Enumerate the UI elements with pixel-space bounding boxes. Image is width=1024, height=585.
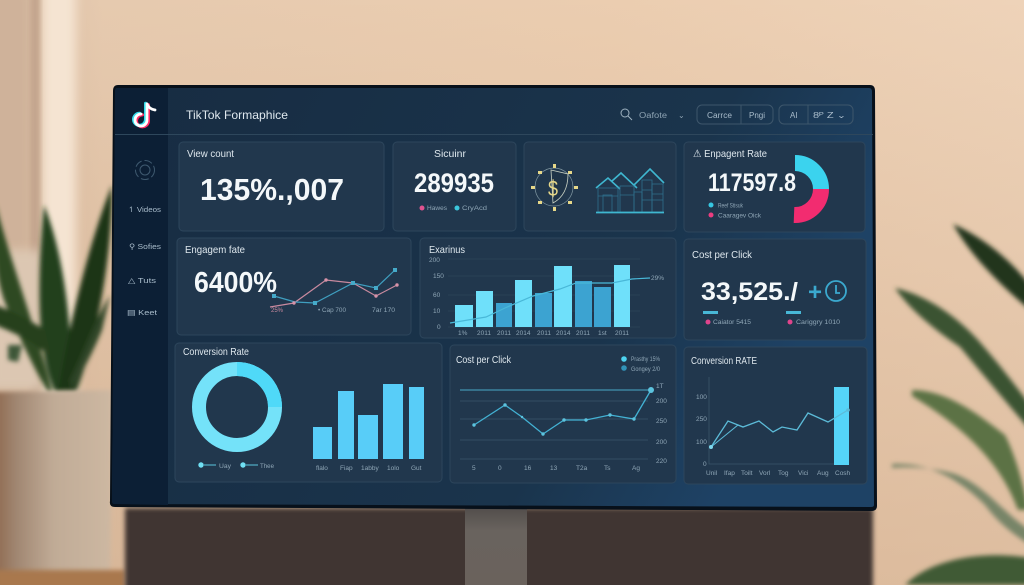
panel: sicuinr metric: 289935 (414, 168, 494, 198)
panel: earnings bar chart: 150 (433, 273, 444, 280)
panel: cost per click line chart: 0 (498, 465, 502, 472)
monitor stand (465, 505, 527, 585)
right plant (892, 224, 1024, 585)
panel: conversion RATE combo chart: 100 (696, 439, 707, 446)
panel: engagement line chart (177, 238, 411, 335)
header controls (621, 105, 853, 124)
chart: bars (455, 265, 630, 327)
icon: search (621, 109, 632, 120)
panel: cost per click metric: Cost per Click (692, 249, 753, 261)
panel: engagement line chart: Engagem fate (185, 244, 245, 256)
panel: conversion rate donut and bars: 1olo (387, 465, 400, 472)
panel: conversion RATE combo chart: Vorl (759, 470, 771, 477)
panel: conversion rate donut and bars: 1abby (361, 465, 379, 472)
panel: view count: 135%.,007 (200, 172, 344, 207)
monitor bezel (110, 85, 877, 511)
panel: conversion RATE combo chart: Toilt (741, 470, 753, 477)
nav label: Tuts: △ Tuts (128, 276, 156, 285)
chart: half donut (794, 163, 821, 215)
panel: cost per click metric: Cariggry 1010 (796, 319, 840, 326)
header controls: Pngi (749, 111, 765, 120)
furniture behind monitor (0, 508, 873, 585)
panel: conversion RATE combo chart: Cosh (835, 470, 851, 477)
panel: conversion RATE combo chart: Unil (706, 470, 718, 477)
panel: engagement line chart: 25% (271, 308, 284, 314)
panel: engagement rate donut (684, 142, 865, 232)
panel: sicuinr metric: CryAcd (462, 205, 487, 212)
panel: earnings bar chart: 2014 (516, 330, 531, 337)
panel: conversion RATE combo chart: Conversion RATE (691, 355, 757, 367)
panel: conversion RATE combo chart: 100 (696, 394, 707, 401)
panel: view count: View count (187, 148, 234, 160)
icon: dollar shield (531, 164, 578, 211)
panel: conversion rate donut and bars: Fiap (340, 465, 353, 472)
panel: conversion rate donut and bars (175, 343, 442, 482)
panel: earnings bar chart: 60 (433, 292, 441, 299)
panel: earnings bar chart: 2011 (615, 330, 629, 337)
panel: earnings bar chart (420, 238, 676, 338)
panel: conversion RATE combo chart: Ifap (724, 470, 735, 477)
icon: TikTok logo (134, 103, 155, 127)
header controls: 8ᴾ Z ⌄ (813, 111, 846, 120)
panel: earnings bar chart: 29% (651, 275, 664, 282)
panel: conversion rate donut and bars: Thee (260, 463, 274, 470)
panel: cost per click line chart: Ts (604, 465, 611, 472)
panel: earnings bar chart: 2014 (556, 330, 571, 337)
panel: conversion rate donut and bars: Gut (411, 465, 422, 472)
header controls: AI (790, 111, 798, 120)
panel: conversion rate donut and bars: flalo (316, 465, 328, 472)
panel: engagement rate donut: Caaragev Oick (718, 212, 762, 220)
panel: earnings bar chart: 2011 (537, 330, 551, 337)
icon: city houses (596, 169, 664, 212)
panel: view count (179, 142, 384, 231)
panel: earnings bar chart: 2011 (477, 330, 491, 337)
panel: cost per click line chart: Gongey 2/0 (631, 366, 660, 373)
panel: earnings bar chart: 0 (437, 324, 441, 331)
chart: tall bar (834, 387, 849, 465)
panel: engagement rate donut: Reef Stisuk (718, 202, 744, 210)
panel: earnings bar chart: Exarinus (429, 244, 465, 256)
chart: two lines (270, 268, 399, 307)
panel: engagement line chart: • Cap 700 (318, 307, 346, 314)
panel: earnings bar chart: 1% (458, 330, 468, 337)
panel: conversion rate donut and bars: Uay (219, 463, 232, 470)
header controls: Carrce (707, 111, 733, 120)
panel: earnings bar chart: 10 (433, 308, 441, 315)
panel: earnings bar chart: 2011 (497, 330, 511, 337)
panel: engagement rate donut: 117597.8 (708, 169, 796, 197)
panel: cost per click line chart: 250 (656, 418, 667, 425)
panel: cost per click line chart: 16 (524, 465, 532, 472)
panel: earnings bar chart: 1st (598, 330, 607, 337)
chart: donut (199, 369, 275, 445)
panel: cost per click metric: Caiator 5415 (713, 319, 751, 326)
panel: cost per click line chart: 200 (656, 439, 667, 446)
panel: earnings bar chart: 2011 (576, 330, 590, 337)
nav label: Keet: ▤ Keet (127, 308, 158, 317)
chart: line (474, 390, 651, 434)
icon: dollar shield: $ (548, 176, 558, 201)
panel: cost per click line chart: Prasthy 15% (631, 356, 660, 363)
panel: engagement rate donut: ⚠ Enpagent Rate (693, 148, 767, 160)
chart: trend line (450, 278, 650, 323)
chart: line (711, 410, 848, 447)
panel: cost per click line chart: Ag (632, 465, 640, 472)
panel: sicuinr metric: Hawes (427, 205, 448, 212)
header controls: ⌄ (678, 111, 685, 120)
icon: clock (826, 281, 846, 301)
panel: conversion RATE combo chart: 250 (696, 416, 707, 423)
panel: cost per click line chart: Cost per Click (456, 354, 512, 366)
panel: cost per click metric: 33,525./ (701, 278, 798, 306)
header controls: Oafote (639, 111, 668, 120)
screen (112, 88, 874, 507)
panel: cost per click line chart: 1T (656, 383, 664, 390)
nav label: Videos: ↿ Videos (128, 205, 161, 214)
panel: conversion rate donut and bars: Conversion Rate (183, 346, 249, 358)
panel: earnings bar chart: 200 (429, 257, 440, 264)
panel: cost per click metric (684, 239, 866, 340)
title: TikTok Formaphice (186, 108, 288, 122)
panel: engagement line chart: 6400% (194, 267, 277, 299)
header divider (115, 134, 873, 136)
icon: profile ring (136, 160, 154, 180)
nav label: Sofies: ⚲ Sofies (129, 242, 161, 251)
panel: conversion RATE combo chart (684, 347, 867, 484)
panel: cost per click line chart: 5 (472, 465, 476, 472)
panel: cost per click line chart: 200 (656, 398, 667, 405)
panel: conversion RATE combo chart: Aug (817, 470, 829, 477)
plant pot (0, 390, 112, 585)
panel: conversion RATE combo chart: 0 (703, 461, 707, 468)
panel: sicuinr metric: Sicuinr (434, 148, 466, 160)
panel: cost per click line chart: 13 (550, 465, 558, 472)
left plant (0, 185, 112, 392)
panel: sicuinr metric (393, 142, 516, 231)
panel: cost per click metric: + (808, 279, 822, 306)
panel: conversion RATE combo chart: Tog (778, 470, 789, 477)
panel: cost per click line chart (450, 345, 676, 483)
sidebar (112, 88, 168, 505)
panel: engagement line chart: 7ar 170 (372, 307, 395, 314)
panel: cost per click line chart: 220 (656, 458, 667, 465)
chart: bars (313, 384, 424, 459)
panel: conversion RATE combo chart: Vici (798, 470, 808, 477)
panel: illustration icons (524, 142, 676, 231)
panel: cost per click line chart: T2a (576, 465, 588, 472)
